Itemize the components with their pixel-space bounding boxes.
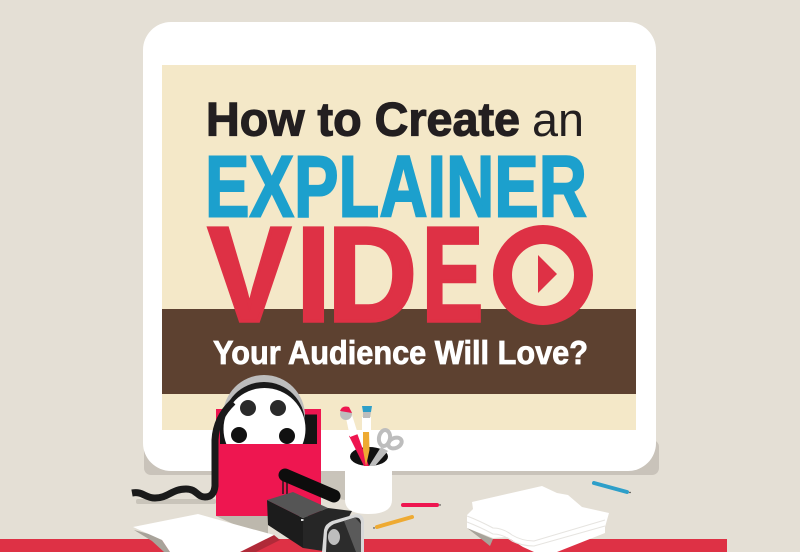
title: VIDEO: [208, 200, 584, 350]
title: How to Create an: How to Create: [206, 92, 520, 146]
paint brush blue: [362, 406, 372, 466]
subtitle: Your Audience Will Love?: [213, 334, 588, 371]
paint brush pink: [340, 406, 369, 466]
cup opening: [350, 447, 388, 466]
pencil: red: [403, 504, 441, 506]
box back panel: [216, 409, 321, 449]
title: How to Create an: an: [532, 93, 584, 146]
camera handle: [285, 475, 334, 496]
title: VIDEO: VID: [208, 200, 417, 350]
reel: [224, 388, 306, 470]
film strip: [132, 402, 233, 498]
floor shadows: [136, 474, 345, 537]
video camera: [267, 475, 364, 552]
scissors: [369, 429, 403, 466]
title: VIDEO: E: [422, 201, 483, 350]
red desk edge: [0, 539, 727, 552]
pencil: orange: [373, 517, 412, 529]
paper stack: [467, 486, 609, 552]
title: EXPLAINER: EXPLAINER: [205, 138, 587, 236]
screen panel: [162, 65, 636, 430]
reel grey rim: [223, 375, 305, 457]
pencil: blue: [594, 483, 631, 493]
play ring forming the letter O: [502, 234, 584, 316]
film box and reel: [132, 375, 321, 516]
cup body: [345, 463, 392, 514]
camera body: [267, 500, 303, 548]
brushes and scissors cup: [340, 406, 403, 514]
camera lens: [322, 514, 364, 552]
left paper sheet: [133, 514, 280, 552]
monitor frame: [143, 22, 656, 471]
camera handle supports: [283, 478, 287, 494]
box front: [216, 444, 321, 516]
monitor shadow: [144, 440, 659, 475]
film wrap arc: [223, 382, 305, 464]
